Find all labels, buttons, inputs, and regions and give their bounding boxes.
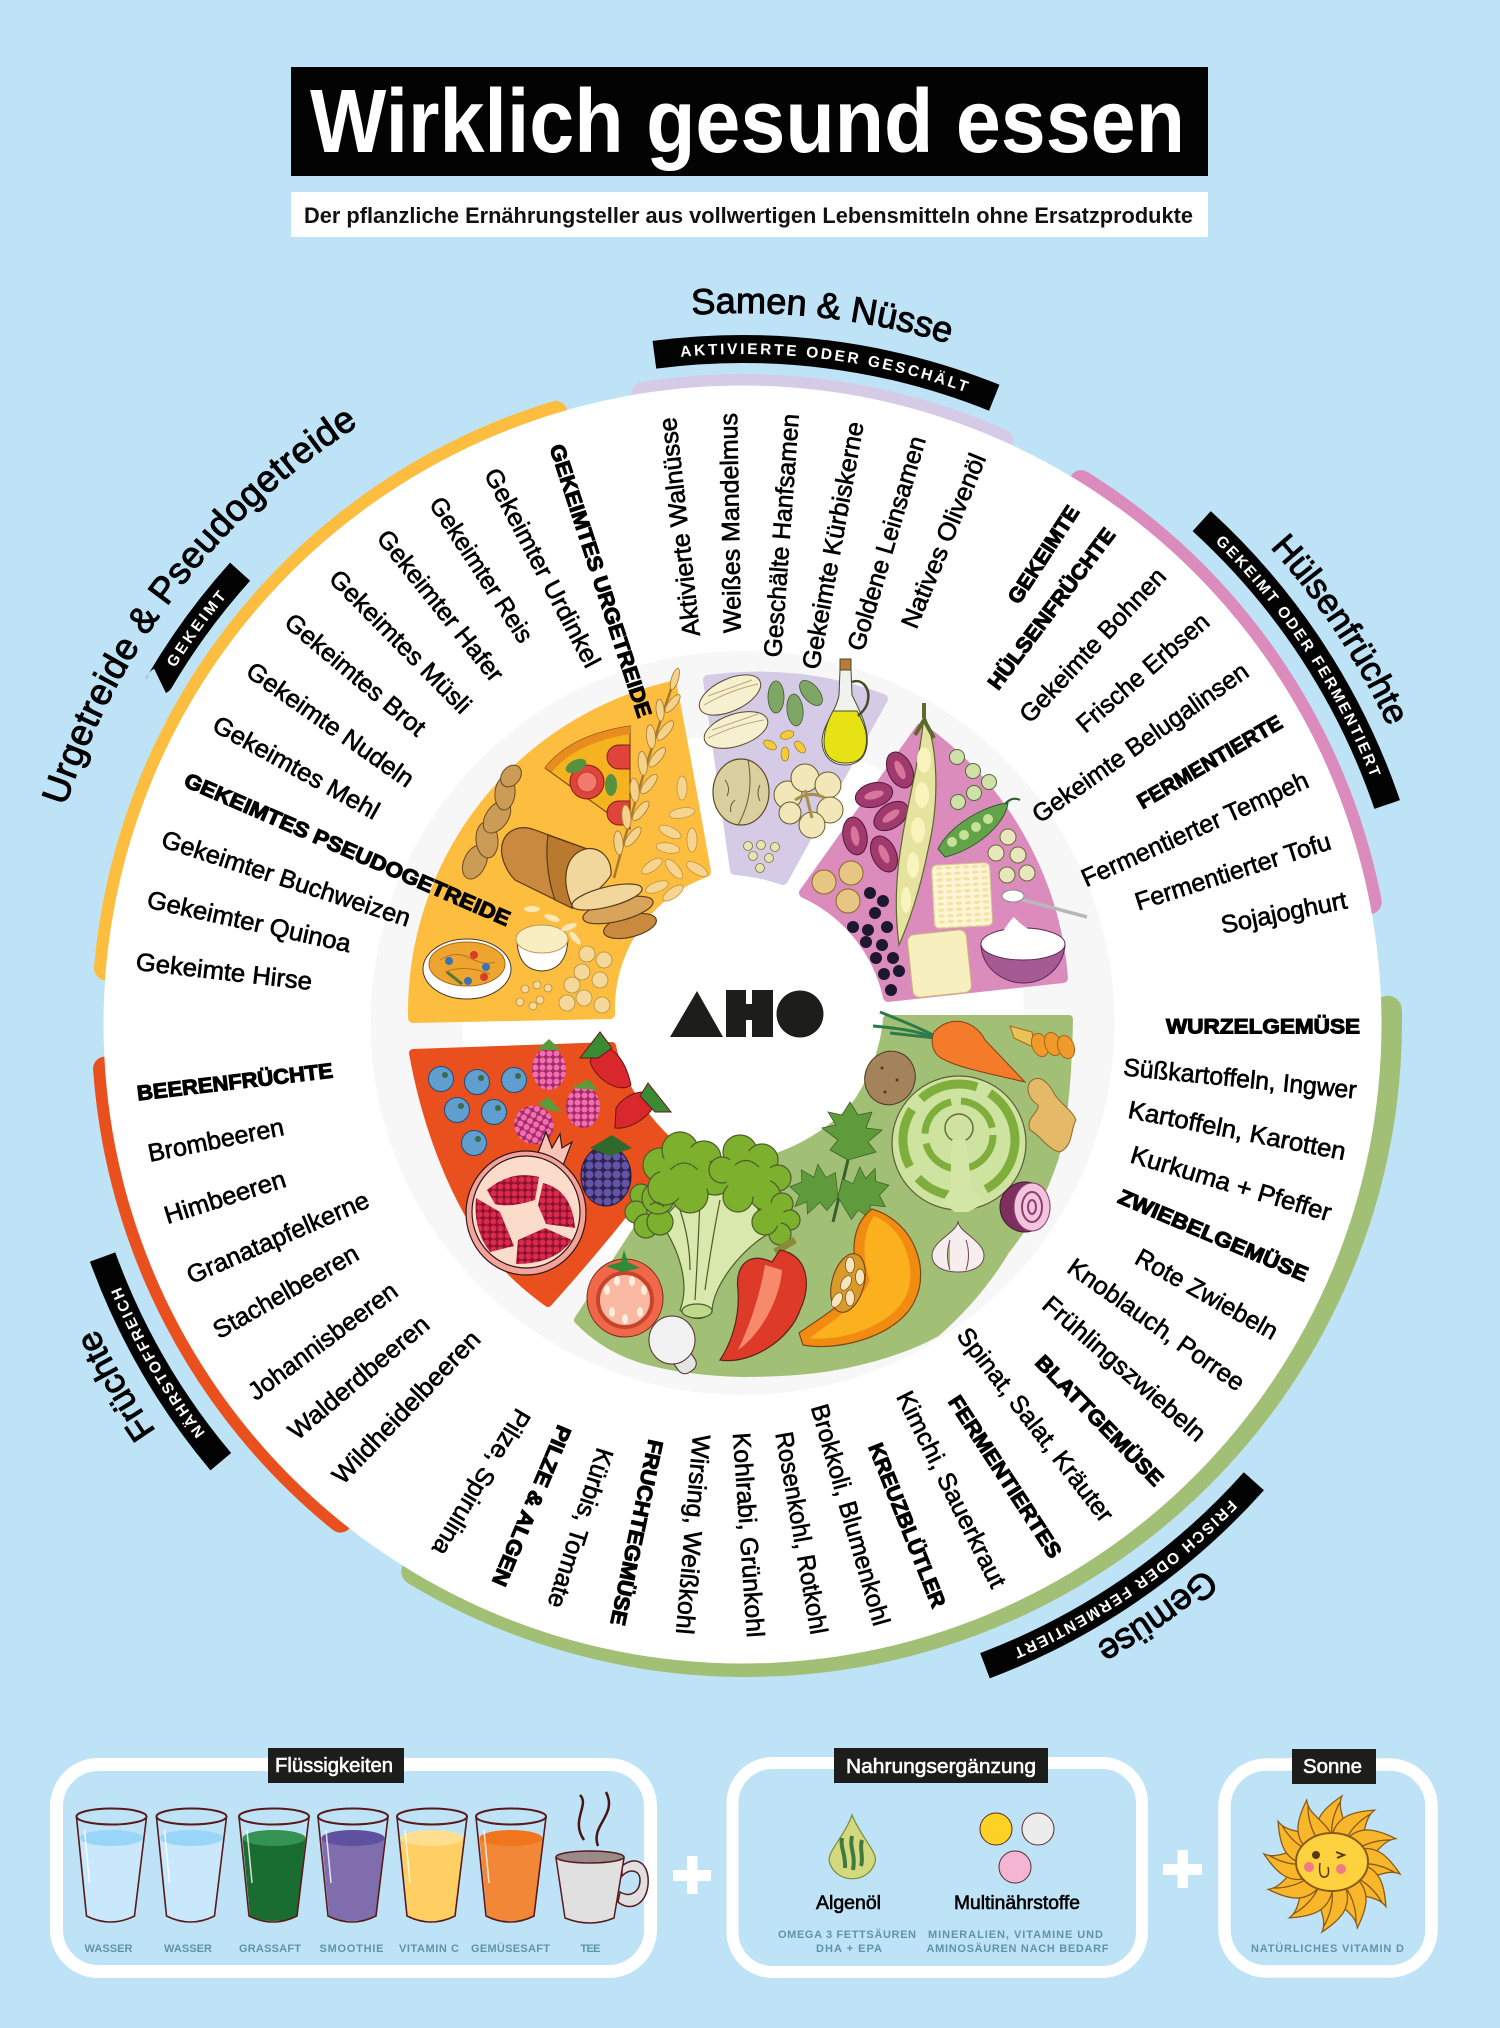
labels: Hülsenfrüchte: GEKEIMTE bbox=[1004, 502, 1084, 608]
text: supplement notes: AMINOSÄUREN NACH BEDARF bbox=[926, 1942, 1109, 1955]
labels: Hülsenfrüchte: Gekeimte Belugalinsen bbox=[1027, 657, 1254, 829]
icon: tempeh bbox=[931, 863, 993, 928]
labels: Früchte: Stachelbeeren bbox=[208, 1239, 364, 1345]
labels: Früchte: Wildheidelbeeren bbox=[327, 1325, 486, 1490]
icon: potato bbox=[857, 1044, 923, 1112]
icon: glass water 1 bbox=[76, 1808, 146, 1922]
labels: Gemüse: Kartoffeln, Karotten bbox=[1126, 1096, 1348, 1166]
labels: Gemüse: Rosenkohl, Rotkohl bbox=[769, 1430, 833, 1636]
glass captions: GRASSAFT bbox=[239, 1943, 301, 1955]
heading: Hülsenfrüchte: Hülsenfrüchte bbox=[1271, 532, 1403, 724]
labels: Gemüse: Kimchi, Sauerkraut bbox=[890, 1387, 1012, 1593]
labels: Früchte: Granatapfelkerne bbox=[182, 1186, 374, 1290]
icon: green peas bbox=[950, 750, 996, 810]
labels: Gemüse: BLATTGEMÜSE bbox=[1030, 1351, 1168, 1491]
glass captions: SMOOTHIE bbox=[320, 1943, 384, 1955]
plate: white disc with grey ring bbox=[104, 386, 1382, 1664]
icon: raspberries bbox=[507, 1039, 600, 1151]
icon: ginger bbox=[1028, 1078, 1076, 1152]
icon: garlic bbox=[932, 1221, 984, 1272]
subtitle banner: Der pflanzliche Ernährungsteller aus vollwertigen Lebensmitteln ohne Ersatzprodukte bbox=[304, 203, 1193, 228]
icon: pine nuts bbox=[762, 729, 808, 761]
labels: Früchte: Himbeeren bbox=[161, 1165, 289, 1230]
heading: Samen und Nüsse: AKTIVIERTE ODER GESCHÄLT bbox=[681, 343, 970, 391]
icon: walnut bbox=[713, 759, 769, 825]
icon: tea cup bbox=[556, 1792, 648, 1923]
labels: Früchte: Walderdbeeren bbox=[283, 1310, 435, 1446]
icon: walnut kernel bbox=[774, 764, 843, 838]
wedge: Früchte bbox=[413, 1032, 673, 1303]
labels: Hülsenfrüchte: FERMENTIERTE bbox=[1133, 711, 1287, 814]
wedge: Hülsenfrüchte bbox=[804, 703, 1087, 998]
labels: Samen und Nüsse bbox=[654, 413, 992, 671]
heading: Früchte: NÄHRSTOFFREICH bbox=[111, 1288, 205, 1438]
heading: Gemüse: Gemüse bbox=[1098, 1573, 1216, 1658]
icon: small seeds bbox=[744, 840, 780, 872]
labels: Gemüse: Kürbis, Tomate bbox=[542, 1445, 618, 1611]
icon: porridge bowl bbox=[423, 939, 511, 999]
labels: Früchte bbox=[136, 1060, 486, 1490]
icon: carrot bbox=[873, 1012, 1025, 1082]
glass captions bbox=[84, 1942, 600, 1955]
wedge: Urgetreide bbox=[413, 664, 710, 1018]
icon: wheat ear bbox=[600, 664, 692, 882]
icon: plus 2 bbox=[1163, 1850, 1202, 1888]
text: supplement notes: OMEGA 3 FETTSÄUREN bbox=[778, 1928, 916, 1941]
icon: tomato bbox=[587, 1250, 663, 1337]
labels: Hülsenfrüchte: Sojajoghurt bbox=[1218, 887, 1350, 939]
labels: Gemüse: FERMENTIERTES bbox=[943, 1392, 1066, 1562]
glass captions: WASSER bbox=[84, 1943, 133, 1955]
glass captions: GEMÜSESAFT bbox=[471, 1942, 550, 1955]
icon: olive oil bottle bbox=[822, 659, 868, 765]
icon: rice bowl bbox=[516, 925, 568, 971]
labels: Gemüse: Rote Zwiebeln bbox=[1130, 1243, 1283, 1346]
heading: Samen und Nüsse bbox=[652, 288, 1000, 411]
labels: Samen und Nüsse: Geschälte Hanfsamen bbox=[759, 413, 805, 658]
icon: red pepper bbox=[720, 1240, 806, 1361]
heading: Hülsenfrüchte: GEKEIMT ODER FERMENTIERT bbox=[1217, 536, 1381, 774]
labels: Urgetreide und Pseudogetreide: Gekeimtes Müsli bbox=[323, 565, 477, 719]
wedge: Samen und Nüsse bbox=[693, 659, 883, 880]
labels: Urgetreide und Pseudogetreide: Gekeimte Hirse bbox=[134, 948, 314, 996]
labels: Früchte: Brombeeren bbox=[146, 1113, 286, 1168]
labels: Gemüse: Süßkartoffeln, Ingwer bbox=[1122, 1053, 1358, 1105]
glass captions: TEE bbox=[580, 1943, 600, 1955]
icon: glass smoothie bbox=[318, 1808, 388, 1922]
icon: bread loaf bbox=[502, 828, 659, 943]
labels: Hülsenfrüchte: Fermentierter Tempeh bbox=[1077, 766, 1313, 893]
icon: supplement pills bbox=[980, 1813, 1054, 1883]
text: supplement notes bbox=[778, 1928, 1109, 1955]
icon: spoon bbox=[1002, 890, 1087, 917]
icon: long pod bbox=[896, 703, 936, 945]
labels: Gemüse bbox=[426, 1016, 1360, 1638]
labels: Hülsenfrüchte: Frische Erbsen bbox=[1071, 608, 1215, 738]
icon: kidney beans bbox=[840, 748, 919, 876]
labels: Hülsenfrüchte: Fermentierter Tofu bbox=[1132, 828, 1334, 916]
labels: Urgetreide und Pseudogetreide: Gekeimter Hafer bbox=[371, 525, 509, 687]
heading: Samen und Nüsse: Samen & Nüsse bbox=[692, 288, 952, 342]
icon: pumpkin seeds bbox=[768, 676, 827, 727]
labels: Früchte: Johannisbeeren bbox=[243, 1277, 403, 1406]
glass captions: WASSER bbox=[164, 1943, 212, 1955]
labels: Gemüse: Knoblauch, Porree bbox=[1062, 1253, 1250, 1397]
labels: Gemüse: PILZE & ALGEN bbox=[487, 1422, 575, 1589]
labels: Urgetreide und Pseudogetreide: Gekeimtes Brot bbox=[279, 608, 431, 742]
labels: Gemüse: KREUZBLÜTLER bbox=[863, 1440, 950, 1611]
panel: Sonne bbox=[1224, 1749, 1432, 1972]
icon: blueberries bbox=[428, 1066, 526, 1156]
labels: Urgetreide und Pseudogetreide: Gekeimter Quinoa bbox=[144, 886, 354, 958]
labels: Früchte: BEERENFRÜCHTE bbox=[136, 1060, 334, 1105]
heading: Gemüse: FRISCH ODER FERMENTIERT bbox=[1016, 1500, 1238, 1659]
title banner: Wirklich gesund essen bbox=[310, 72, 1185, 172]
labels: Samen und Nüsse: Natives Olivenöl bbox=[896, 450, 992, 632]
icon: glass vitamin c bbox=[397, 1808, 467, 1922]
icon: glass water 2 bbox=[156, 1808, 226, 1922]
panel: Nahrungsergänzung: Nahrungsergänzung bbox=[846, 1756, 1036, 1778]
icon: blackberry bbox=[581, 1135, 632, 1206]
labels: Hülsenfrüchte: Gekeimte Bohnen bbox=[1014, 563, 1172, 728]
icon: pea pod bbox=[938, 799, 1020, 857]
labels: Samen und Nüsse: Weißes Mandelmus bbox=[715, 413, 747, 633]
icon: broccoli bbox=[625, 1132, 800, 1319]
text: supplement notes: DHA + EPA bbox=[816, 1943, 882, 1955]
labels: Urgetreide und Pseudogetreide bbox=[134, 442, 655, 996]
labels: Samen und Nüsse: Goldene Leinsamen bbox=[842, 433, 932, 654]
panel: Flüssigkeiten bbox=[56, 1748, 650, 1972]
icon: red onion bbox=[1000, 1182, 1050, 1232]
icon: glass grass juice bbox=[239, 1808, 309, 1922]
labels: Urgetreide und Pseudogetreide: Gekeimtes Mehl bbox=[208, 711, 384, 825]
labels: Gemüse: Spinat, Salat, Kräuter bbox=[951, 1322, 1119, 1528]
text: Multinährstoffe: Multinährstoffe bbox=[954, 1893, 1080, 1914]
icon: sun bbox=[1264, 1796, 1400, 1932]
icon: pomegranate bbox=[466, 1132, 586, 1275]
icon: pizza slice bbox=[545, 726, 630, 829]
text: vitamin D caption: NATÜRLICHES VITAMIN D bbox=[1251, 1942, 1404, 1955]
icon: oat grains bbox=[639, 776, 710, 904]
heading: Urgetreide und Pseudogetreide: Urgetreide & Pseudogetreide bbox=[42, 412, 356, 802]
icon: plus 1 bbox=[673, 1856, 711, 1894]
icon: braided pasta bbox=[457, 761, 526, 883]
labels: Gemüse: ZWIEBELGEMÜSE bbox=[1115, 1186, 1311, 1286]
icon: glass vegetable juice bbox=[476, 1808, 546, 1922]
panel: Flüssigkeiten: Flüssigkeiten bbox=[275, 1755, 393, 1777]
heading: Früchte: Früchte bbox=[82, 1332, 155, 1443]
labels: Samen und Nüsse: Gekeimte Kürbiskerne bbox=[797, 420, 870, 671]
panel: Nahrungsergänzung bbox=[732, 1748, 1142, 1972]
labels: Gemüse: FRUCHTEGMÜSE bbox=[605, 1438, 667, 1627]
labels: Urgetreide und Pseudogetreide: GEKEIMTES URGETREIDE bbox=[545, 442, 655, 720]
icon: strawberries bbox=[580, 1032, 671, 1128]
wedge: Gemüse bbox=[578, 1012, 1078, 1377]
icon: tofu bbox=[907, 929, 972, 998]
glass captions: VITAMIN C bbox=[399, 1943, 459, 1955]
labels: Gemüse: Brokkoli, Blumenkohl bbox=[805, 1401, 895, 1629]
labels: Gemüse: WURZELGEMÜSE bbox=[1166, 1016, 1360, 1038]
labels: Gemüse: Pilze, Spirulina bbox=[426, 1404, 536, 1560]
panel: Sonne: Sonne bbox=[1303, 1756, 1362, 1778]
icon: algae oil drop bbox=[829, 1815, 876, 1879]
labels: Urgetreide und Pseudogetreide: Gekeimter Buchweizen bbox=[158, 826, 414, 932]
icon: cabbage bbox=[892, 1076, 1026, 1212]
icon: yoghurt bowl bbox=[981, 917, 1065, 983]
text: Algenöl: Algenöl bbox=[816, 1893, 881, 1914]
icon: pumpkin bbox=[799, 1209, 921, 1347]
labels: Urgetreide und Pseudogetreide: GEKEIMTES PSEUDOGETREIDE bbox=[181, 769, 513, 931]
labels: Gemüse: Frühlingszwiebeln bbox=[1037, 1291, 1211, 1447]
subtitle banner bbox=[291, 192, 1208, 237]
labels: Gemüse: Kohlrabi, Grünkohl bbox=[727, 1432, 769, 1638]
heading: Urgetreide und Pseudogetreide: GEKEIMT bbox=[168, 590, 224, 666]
icon: chickpeas bbox=[812, 861, 863, 913]
labels: Gemüse: Wirsing, Weißkohl bbox=[670, 1434, 715, 1635]
logo: AHO bbox=[670, 990, 824, 1038]
icon: turmeric bbox=[1010, 1026, 1078, 1061]
icon: black beans bbox=[847, 887, 905, 996]
labels: Urgetreide und Pseudogetreide: Gekeimter Urdinkel bbox=[478, 464, 606, 672]
labels: Hülsenfrüchte bbox=[984, 502, 1350, 939]
icon: mushroom bbox=[649, 1316, 699, 1377]
text: supplement notes: MINERALIEN, VITAMINE UND bbox=[928, 1929, 1103, 1941]
labels: Urgetreide und Pseudogetreide: Gekeimter Reis bbox=[423, 492, 539, 648]
labels: Gemüse: Kurkuma + Pfeffer bbox=[1127, 1141, 1335, 1227]
icon: soy beans bbox=[988, 829, 1035, 883]
icon: sprouted seeds bbox=[516, 906, 612, 1013]
labels: Samen und Nüsse: Aktivierte Walnüsse bbox=[654, 416, 706, 638]
labels: Urgetreide und Pseudogetreide: Gekeimte Nudeln bbox=[241, 657, 419, 793]
labels: Hülsenfrüchte: HÜLSENFRÜCHTE bbox=[984, 524, 1120, 694]
icon: almonds bbox=[693, 667, 772, 755]
icon: parsley bbox=[786, 1102, 896, 1227]
